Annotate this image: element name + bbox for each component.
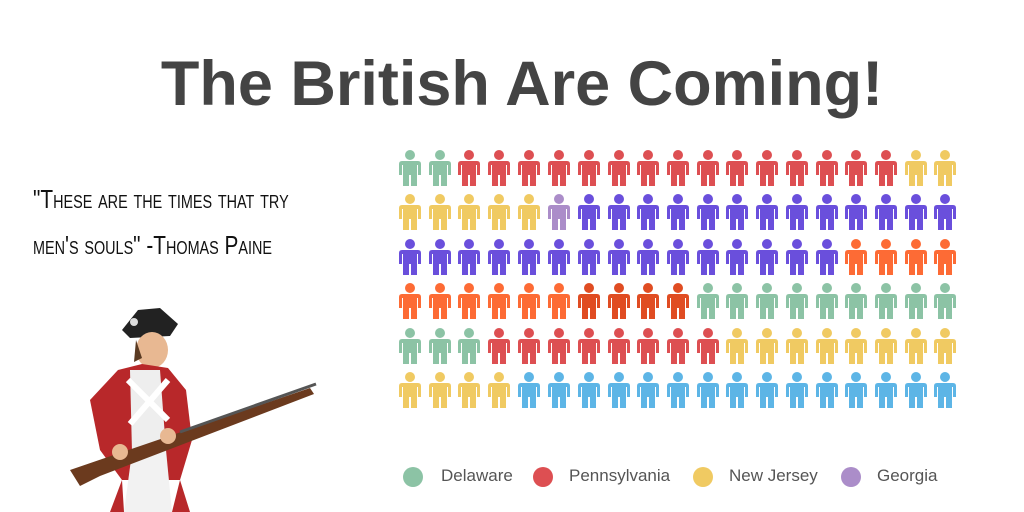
legend: Pennsylvania	[569, 466, 670, 485]
body coat	[90, 364, 192, 512]
legend: New Jersey	[729, 466, 818, 485]
row 6	[399, 372, 956, 408]
row 3	[399, 239, 956, 275]
quote text: men's souls" -Thomas Paine	[33, 230, 272, 260]
row 4	[399, 283, 956, 319]
quote text: "These are the times that try	[33, 184, 289, 214]
title: The British Are Coming!	[161, 49, 883, 119]
legend	[403, 466, 938, 487]
quote text	[33, 184, 289, 260]
row 2	[399, 194, 956, 230]
legend: Delaware	[441, 466, 513, 485]
hat	[122, 308, 178, 338]
legend: Georgia	[877, 466, 937, 485]
musket	[70, 384, 316, 486]
row 5	[399, 328, 956, 364]
illustration: redcoat soldier	[70, 308, 316, 512]
row 1	[399, 150, 956, 186]
head	[134, 332, 168, 368]
hands	[112, 428, 176, 460]
